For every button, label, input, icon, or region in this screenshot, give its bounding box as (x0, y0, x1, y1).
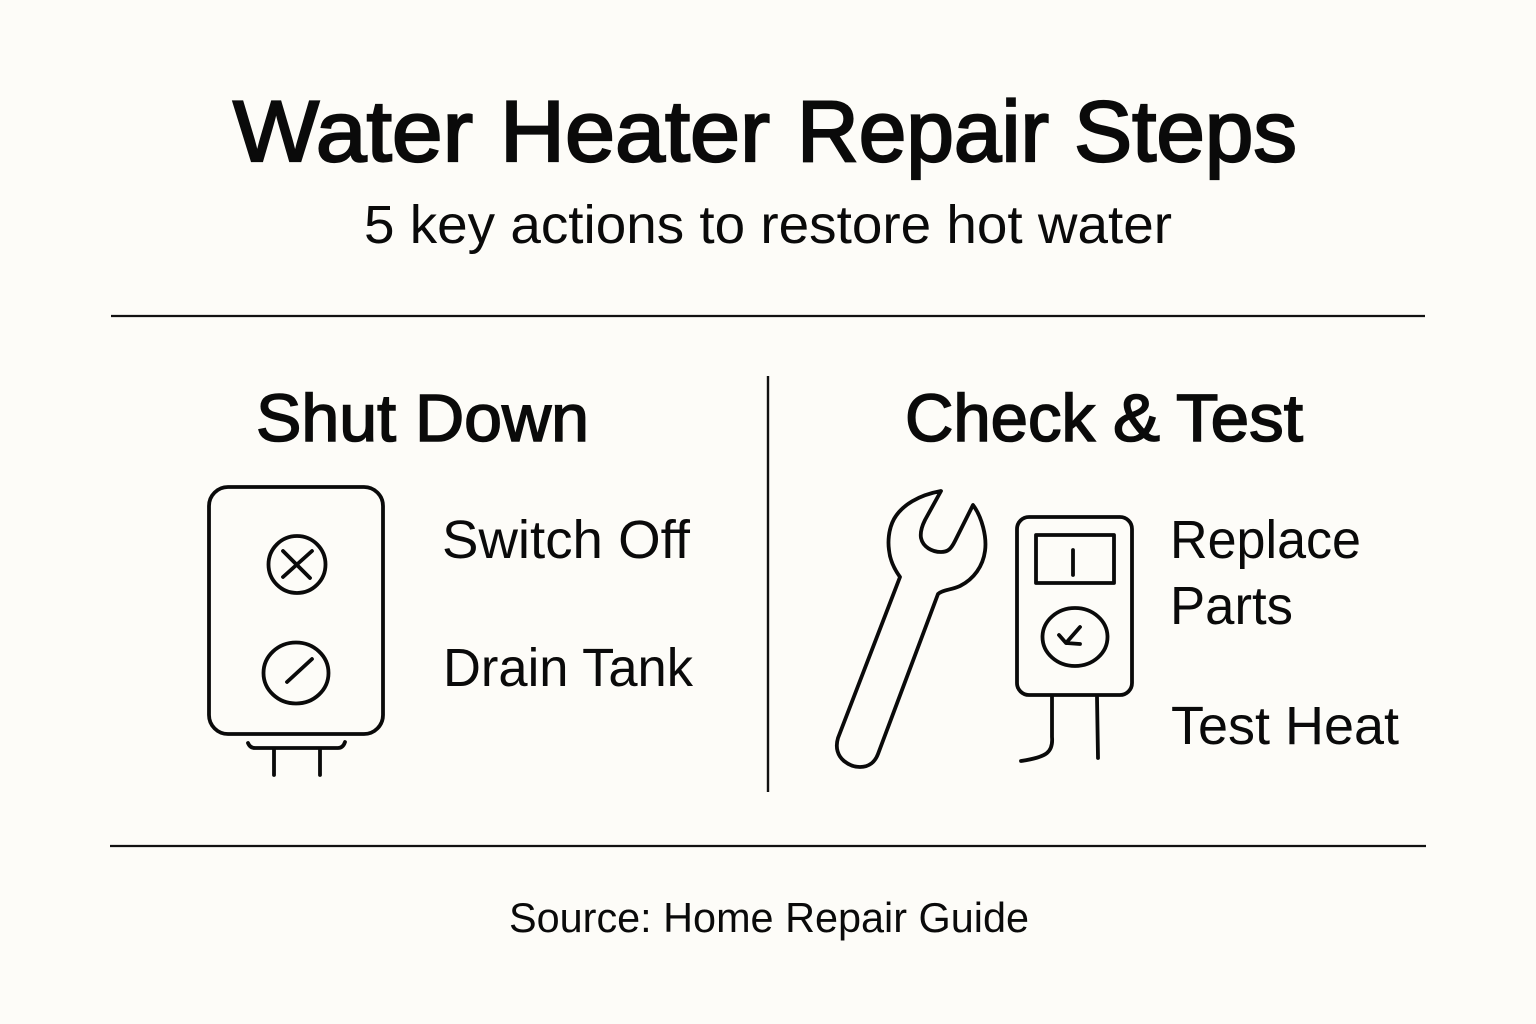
label: replace parts (1170, 510, 1361, 636)
source: Source: Home Repair Guide (509, 894, 1029, 941)
heading: check and test: Check (905, 381, 1095, 456)
title: Water (233, 84, 473, 180)
heading: check and test (905, 381, 1303, 456)
label: replace parts: Replace (1170, 510, 1361, 570)
title: Repair (797, 84, 1049, 180)
heading: shut down: Shut Down (256, 381, 589, 456)
title (233, 84, 1297, 180)
label: switch off: Switch Off (442, 510, 691, 570)
icon: water heater (209, 487, 383, 775)
heading: check and test: & (1113, 381, 1160, 456)
icon: multimeter (1017, 517, 1132, 761)
title: Steps (1074, 84, 1297, 180)
label: test heat: Test Heat (1171, 696, 1399, 756)
label: drain tank: Drain Tank (443, 638, 694, 698)
subtitle: 5 key actions to restore hot water (364, 195, 1172, 255)
label: replace parts: Parts (1170, 576, 1293, 636)
icon: wrench (837, 491, 985, 767)
title: Heater (500, 84, 770, 180)
heading: check and test: Test (1176, 381, 1303, 456)
